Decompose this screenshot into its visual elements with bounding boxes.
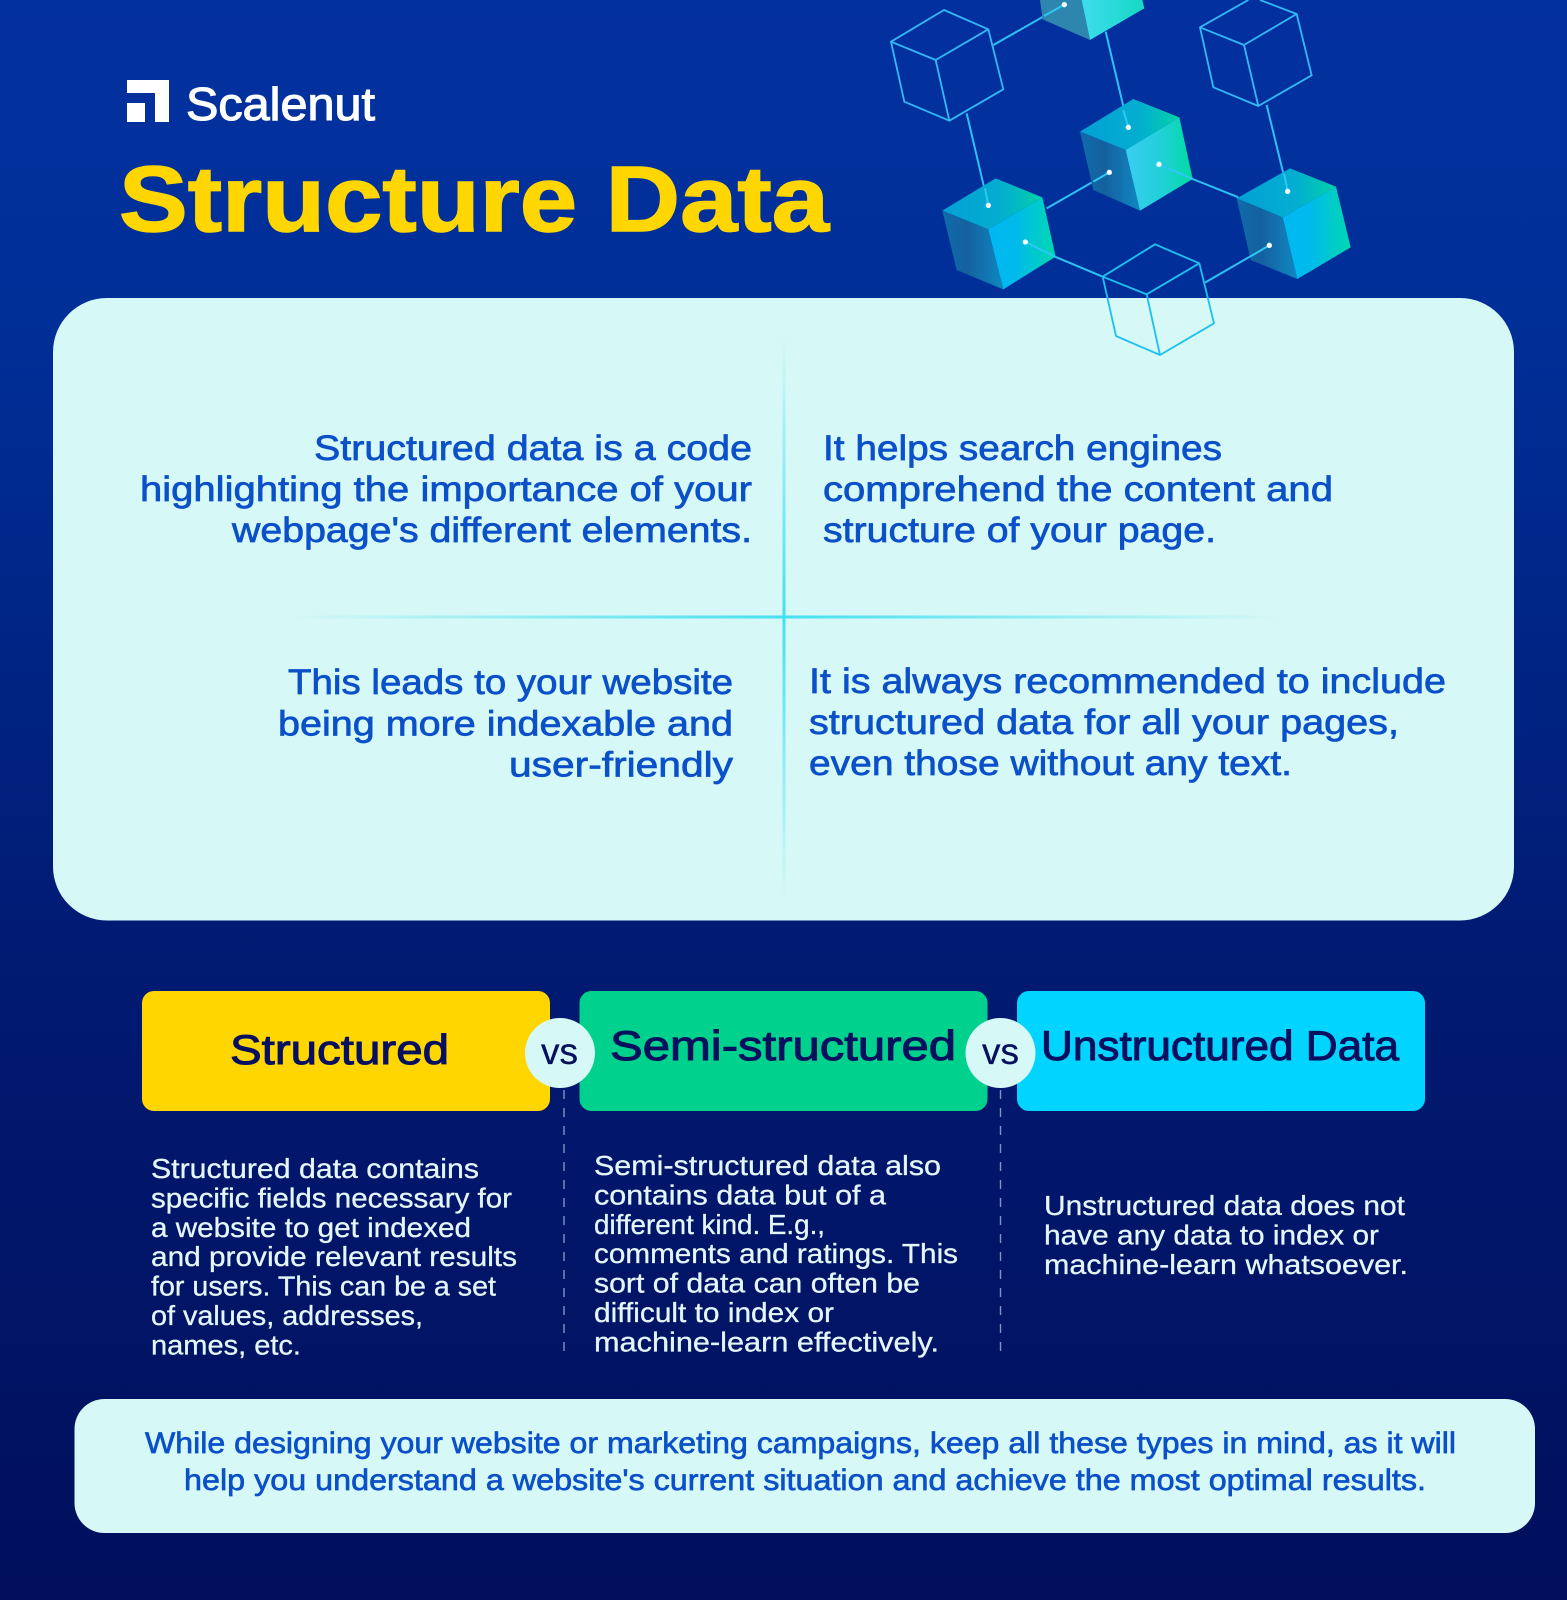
text: unstructured description [1044,1190,1408,1280]
text: search engine comprehension: It helps search engines [823,429,1222,468]
text: structured description: and provide relevant results [151,1241,517,1272]
text: recommendation: It is always recommended to include [809,662,1446,701]
cube: centre filled [1080,99,1193,211]
connector segments over cubes [985,5,1288,257]
text: semi-structured description: contains data but of a [594,1179,887,1210]
vs badge 1 [525,1018,595,1088]
text: search engine comprehension [823,429,1333,550]
text: search engine comprehension: structure of your page. [823,511,1216,550]
panel: conclusion [74,1399,1535,1533]
cube: top partial filled [1040,0,1144,40]
text: structured description: of values, addresses, [151,1300,423,1331]
text: indexable and user-friendly [278,663,734,784]
text: structured description: for users. This can be a set [151,1271,496,1302]
text: semi-structured description: Semi-structured data also [594,1150,941,1181]
text: closing advice: While designing your website or marketing campaigns, keep all these types in mind, as it will [145,1427,1456,1460]
text: unstructured description: Unstructured data does not [1044,1190,1405,1221]
text: semi-structured description: machine-learn effectively. [594,1326,939,1357]
text: structured description [151,1153,517,1360]
card: Unstructured Data [1017,991,1425,1111]
node dots [986,2,1290,248]
text: indexable and user-friendly: being more indexable and [278,704,733,744]
text: recommendation [809,662,1446,783]
text: semi-structured description [594,1150,958,1357]
text: structured description: names, etc. [151,1329,301,1360]
text: what structured data is: highlighting the importance of your [140,470,752,509]
cube: wireframe top left [891,10,1003,121]
text: structured description: specific fields necessary for [151,1182,512,1213]
text: semi-structured description: sort of data can often be [594,1268,920,1299]
text: indexable and user-friendly: user-friendly [509,746,734,784]
text: closing advice [145,1427,1456,1497]
title: Structure Data [119,147,830,251]
cube: left filled [942,178,1056,289]
text: indexable and user-friendly: This leads to your website [288,663,733,702]
panel: definition quadrants [53,298,1514,920]
card: Structured: Structured [230,1026,449,1073]
text: what structured data is: Structured data is a code [314,429,752,468]
illustration: connected data cubes [891,0,1351,355]
cube: wireframe bottom [1103,244,1214,355]
card: Semi-structured: Semi-structured [610,1022,956,1069]
text: structured description: Structured data contains [151,1153,479,1184]
text: search engine comprehension: comprehend the content and [823,470,1333,509]
text: semi-structured description: comments and ratings. This [594,1238,958,1269]
cube: right filled [1237,168,1351,279]
vs badge 1: vs [541,1031,578,1072]
text: what structured data is [140,429,752,550]
text: closing advice: help you understand a website's current situation and achieve the most optimal results. [184,1464,1426,1497]
connector lines [967,5,1288,283]
text: what structured data is: webpage's different elements. [231,511,752,550]
card: Unstructured Data: Unstructured Data [1041,1022,1400,1069]
text: unstructured description: machine-learn whatsoever. [1044,1249,1408,1280]
card: Semi-structured [580,991,988,1111]
vs badge 2: vs [982,1031,1019,1072]
cube: wireframe top right [1200,0,1312,106]
logo: Scalenut: Scalenut [186,78,375,130]
text: recommendation: even those without any text. [809,744,1292,783]
text: structured description: a website to get indexed [151,1212,471,1243]
card: Structured [142,991,550,1111]
text: semi-structured description: different kind. E.g., [594,1209,825,1240]
vs badge 2 [966,1018,1036,1088]
text: unstructured description: have any data to index or [1044,1219,1379,1250]
dashed column dividers [564,1090,1000,1356]
text: semi-structured description: difficult to index or [594,1297,834,1328]
text: recommendation: structured data for all your pages, [809,703,1399,742]
